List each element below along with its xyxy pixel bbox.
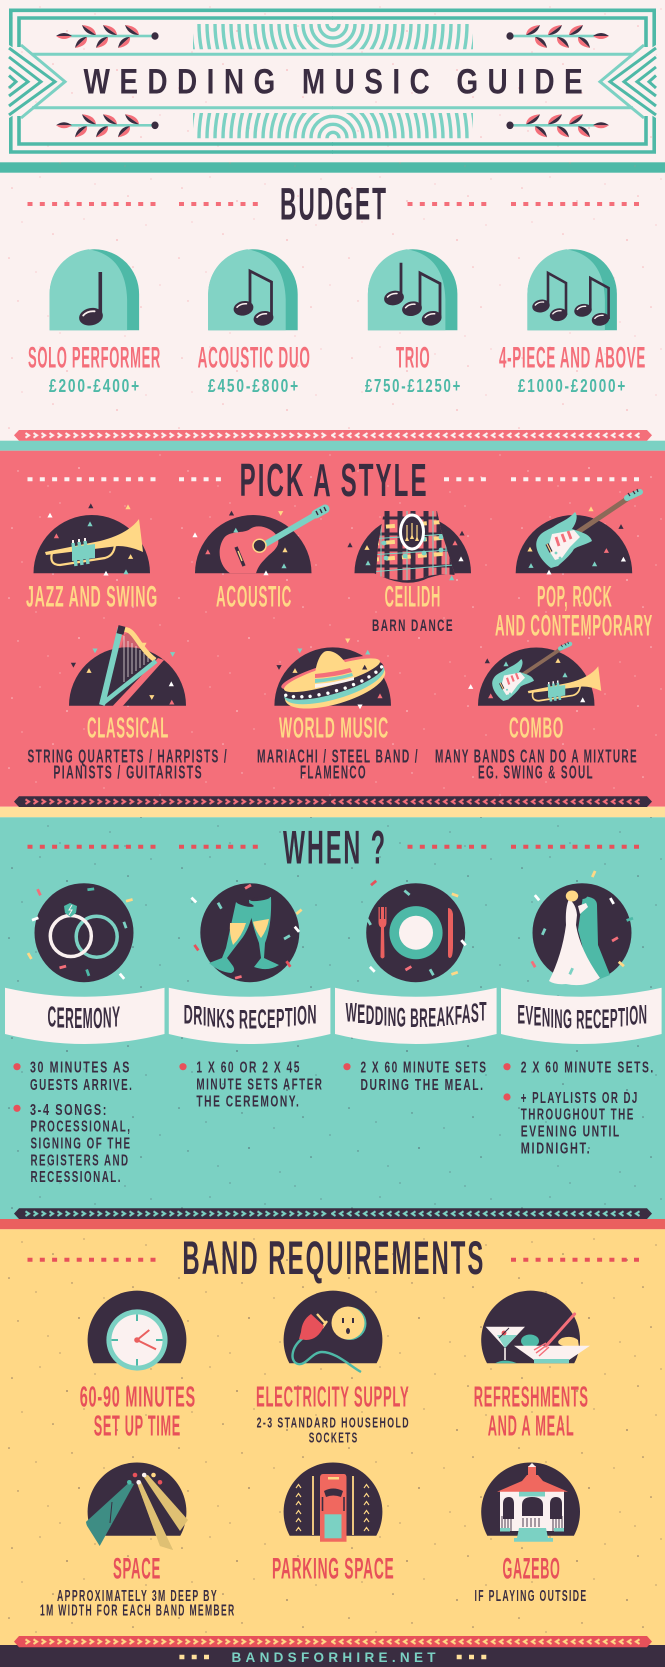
style labels row 2: CLASSICAL (87, 712, 169, 744)
icon: acoustic guitar dome (192, 507, 326, 575)
style labels row 2 (87, 712, 564, 744)
icon: rings (27, 883, 133, 982)
icon: four notes (527, 249, 617, 330)
arrow strip (14, 1636, 652, 1647)
icon: refreshments (481, 1291, 590, 1363)
list text: MINUTE SETS AFTER (196, 1077, 323, 1094)
banner labels: DRINKS RECEPTION (184, 999, 317, 1034)
heading: pick a style: PICK A STYLE (240, 454, 429, 506)
header panel (8, 8, 657, 154)
list text: RECESSIONAL. (30, 1169, 122, 1186)
leaf sprigs (56, 25, 609, 137)
icon: trumpet dome (34, 503, 150, 576)
banner labels (48, 996, 647, 1035)
icon: clock (88, 1291, 186, 1371)
panel: band requirements (28, 1231, 639, 1620)
icon: champagne glasses (190, 883, 303, 982)
style labels row 1: JAZZ AND SWING (26, 581, 158, 614)
requirement labels row 1: 60-90 MINUTES (80, 1382, 196, 1414)
style descriptions: FLAMENCO (300, 763, 367, 783)
arc pattern top (193, 24, 473, 50)
icon: trio notes (368, 249, 457, 330)
style descriptions: STRING QUARTETS / HARPISTS / (28, 747, 228, 767)
icon: electric guitar dome (516, 489, 640, 574)
icon: bride and groom (531, 870, 633, 985)
icon: plug and socket (284, 1291, 382, 1372)
heading: when: WHEN ? (283, 820, 387, 873)
style labels row 2: WORLD MUSIC (279, 712, 389, 744)
icon: plate and cutlery (366, 880, 467, 982)
requirement labels row 2 (113, 1552, 560, 1585)
style descriptions (28, 747, 638, 783)
requirement descriptions (40, 1588, 588, 1620)
requirement labels row 1: ELECTRICITY SUPPLY (256, 1382, 409, 1414)
style labels row 1: ACOUSTIC (216, 581, 292, 614)
banners (5, 988, 662, 1044)
bullets (13, 1063, 511, 1112)
icon: solo note (50, 249, 139, 330)
list text: 1 X 60 OR 2 X 45 (196, 1060, 301, 1077)
list text: 2 X 60 MINUTE SETS (360, 1060, 488, 1077)
list text (30, 1060, 655, 1186)
arc pattern bottom (193, 113, 473, 138)
list text: REGISTERS AND (30, 1152, 130, 1169)
arrow strip (14, 1208, 652, 1219)
banner labels: EVENING RECEPTION (517, 999, 647, 1034)
budget labels: ACOUSTIC DUO (198, 341, 311, 374)
electricity description (257, 1415, 410, 1446)
icon: sombrero dome (274, 638, 391, 718)
barn dance text: BARN DANCE (372, 616, 454, 635)
list text: 3-4 SONGS: (30, 1102, 108, 1119)
style labels row 1: CEILIDH (385, 581, 441, 614)
requirement labels row 2: PARKING SPACE (272, 1552, 394, 1585)
footer url: BANDSFORHIRE.NET (232, 1650, 436, 1665)
budget labels (28, 341, 646, 374)
icon: harp dome (69, 626, 186, 711)
icon: combo dome (468, 642, 601, 706)
list text: 30 MINUTES AS (30, 1060, 131, 1077)
budget prices (49, 376, 627, 396)
electricity description: SOCKETS (309, 1429, 358, 1446)
panel: when (5, 820, 662, 1219)
electricity description: 2-3 STANDARD HOUSEHOLD (257, 1415, 410, 1432)
budget prices: £450-£800+ (208, 376, 300, 396)
style descriptions: PIANISTS / GUITARISTS (53, 763, 203, 783)
header frame (9, 10, 656, 152)
list text: SIGNING OF THE (30, 1136, 132, 1153)
budget prices: £1000-£2000+ (518, 376, 627, 396)
list text: DURING THE MEAL. (360, 1077, 484, 1094)
requirement labels row 1 (80, 1382, 589, 1443)
list text: THE CEREMONY. (196, 1094, 300, 1111)
heading: budget: BUDGET (280, 178, 388, 229)
panel: pick a style: COMBO (509, 712, 564, 744)
banner labels: CEREMONY (48, 1002, 120, 1035)
title: WEDDING MUSIC GUIDE (84, 61, 583, 101)
footer (14, 1636, 652, 1665)
bullet lists (13, 1060, 655, 1186)
requirement descriptions: 1M WIDTH FOR EACH BAND MEMBER (40, 1603, 236, 1620)
panel: band requirements: GAZEBO (502, 1552, 560, 1585)
icon: kilt dome (348, 511, 471, 583)
list text: GUESTS ARRIVE. (30, 1077, 133, 1094)
list text: PROCESSIONAL, (30, 1119, 132, 1136)
budget labels: SOLO PERFORMER (28, 341, 161, 374)
panel: pick a style (14, 454, 653, 807)
budget labels: TRIO (396, 341, 430, 374)
requirement descriptions: APPROXIMATELY 3M DEEP BY (57, 1588, 218, 1605)
budget prices: £200-£400+ (49, 376, 141, 396)
icon: parking car (284, 1463, 382, 1542)
banner labels: WEDDING BREAKFAST (346, 996, 487, 1033)
style labels row 1 (26, 581, 653, 643)
icon: gazebo (481, 1463, 580, 1542)
icon: stage lights (85, 1463, 188, 1550)
list text: MIDNIGHT. (521, 1140, 591, 1157)
style descriptions: MARIACHI / STEEL BAND / (257, 747, 419, 767)
arrow strip (14, 796, 652, 807)
budget prices: £750-£1250+ (365, 376, 462, 396)
requirement labels row 1: SET UP TIME (94, 1411, 181, 1443)
arrow strip (14, 430, 652, 441)
icon: duo notes (208, 249, 298, 330)
panel: budget (14, 178, 652, 441)
requirement labels row 2: SPACE (113, 1552, 161, 1585)
footer squares (179, 1655, 486, 1659)
